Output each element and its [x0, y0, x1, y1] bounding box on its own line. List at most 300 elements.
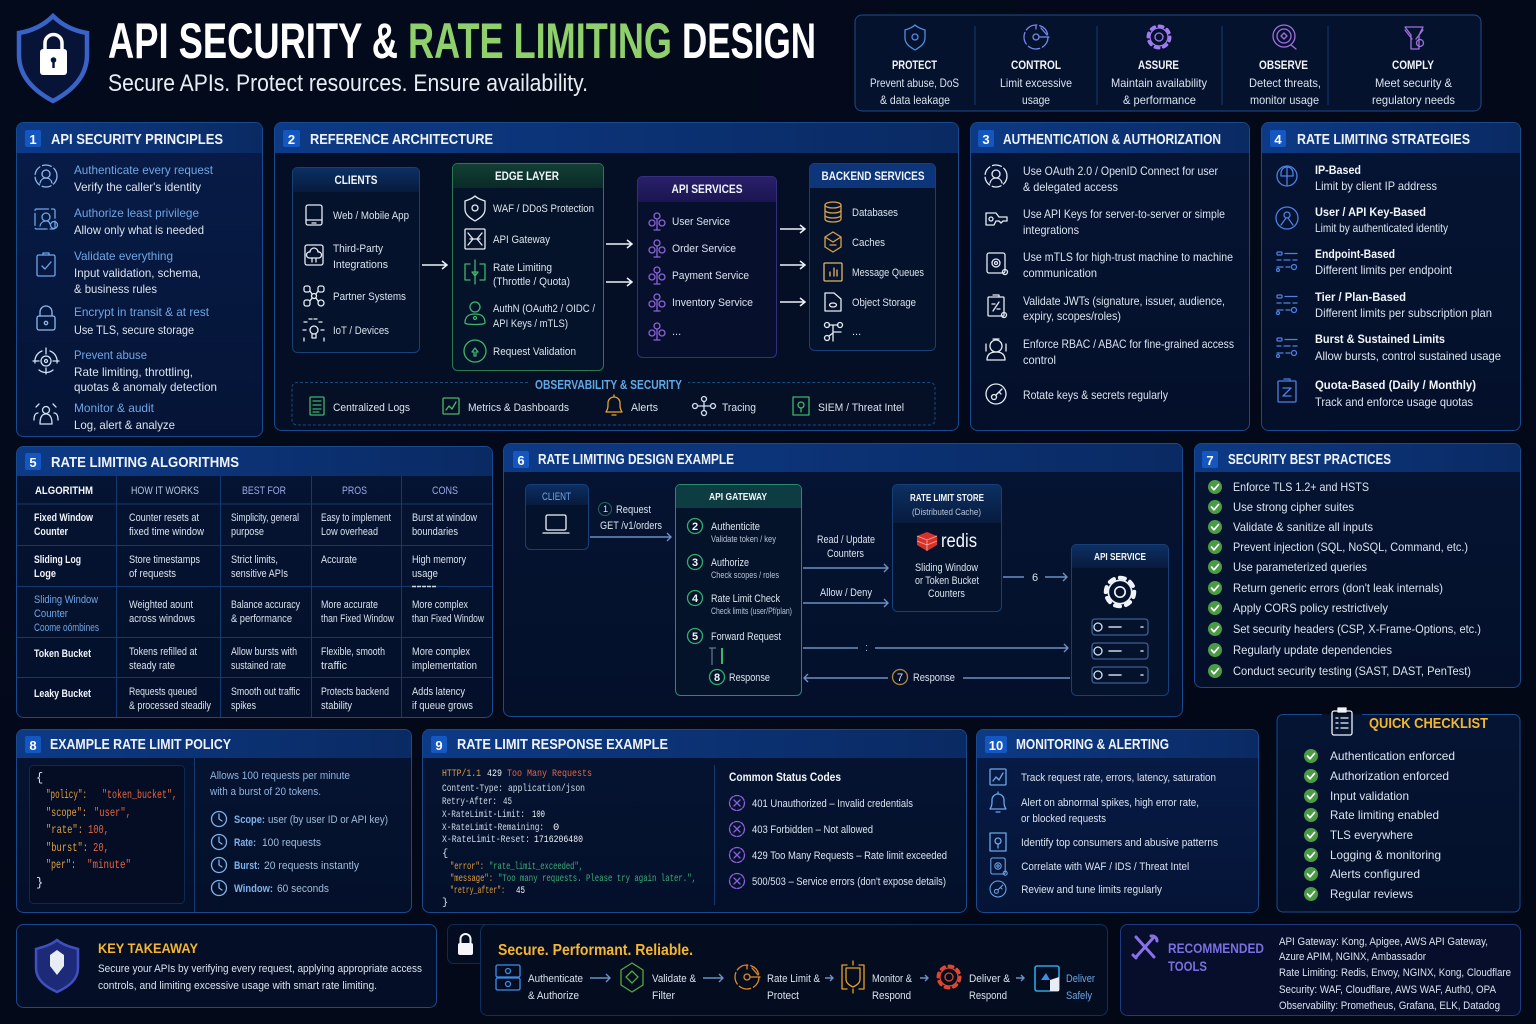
- arrows: services to backend: [780, 225, 805, 306]
- strategy: endpoint: Endpoint-Based: [1315, 247, 1395, 261]
- panel: quick checklist: [1277, 708, 1520, 912]
- title: DESIGN: [682, 13, 816, 69]
- item: review: Review and tune limits regularly: [1021, 884, 1162, 896]
- practices list: Conduct security testing (SAST, DAST, PenTest): [1233, 664, 1471, 678]
- clients box: IoT / Devices: [333, 325, 389, 337]
- backend services box: [810, 164, 936, 350]
- api service box: [1072, 544, 1168, 696]
- row: leaky bucket: spikes: [231, 700, 256, 712]
- status 500: [730, 874, 946, 888]
- row: token bucket: [34, 646, 477, 672]
- item: mtls: Use mTLS for high-trust machine to machine: [1023, 250, 1233, 264]
- code block: policy json: 20,: [93, 841, 109, 855]
- table header: CONS: [432, 485, 458, 497]
- edge layer box: [452, 164, 604, 370]
- api services box: Inventory Service: [672, 297, 753, 309]
- panel: key takeaway: [16, 924, 436, 1008]
- step 7: response: [804, 670, 1070, 684]
- item: correlate: Correlate with WAF / IDS / Threat Intel: [1021, 861, 1189, 873]
- item: oauth: [985, 164, 1218, 194]
- arrow: [920, 975, 928, 981]
- step: deliver: Respond: [969, 990, 1007, 1002]
- heading: [1168, 940, 1264, 974]
- row: sliding log: [34, 554, 466, 586]
- code block: http response: X-RateLimit-Remaining:: [442, 822, 544, 834]
- step 3: Check scopes / roles: [711, 570, 779, 581]
- strategy: burst: Allow bursts, control sustained usage: [1315, 349, 1501, 363]
- principle: encrypt: [37, 305, 210, 337]
- panel 6: rate limiting design example: 6: [517, 453, 525, 468]
- table header: HOW IT WORKS: [131, 485, 199, 497]
- step: deliver safely: Safely: [1066, 990, 1092, 1002]
- panel 5: rate limiting algorithms: 5: [29, 455, 37, 470]
- service instances: [1092, 619, 1148, 683]
- icon: takeaway shield: [36, 940, 78, 992]
- code block: http response: }: [442, 897, 448, 909]
- status 403: 403 Forbidden – Not allowed: [752, 824, 873, 836]
- row: fixed window: purpose: [231, 526, 264, 538]
- status 429: 429 Too Many Requests – Rate limit exceeded: [752, 850, 947, 862]
- tools list: Azure APIM, NGINX, Ambassador: [1279, 951, 1426, 963]
- step 3: [688, 554, 779, 581]
- status 401: 401 Unauthorized – Invalid credentials: [752, 798, 913, 810]
- principle: authorize: [35, 206, 204, 237]
- code block: policy json: 100,: [88, 823, 109, 837]
- policy: rate: Rate:: [234, 837, 256, 849]
- code block: http response: Content-Type:: [442, 783, 503, 795]
- policy: window: 60 seconds: [277, 883, 329, 895]
- code block: http response: application/json: [508, 783, 585, 795]
- code block: policy json: "per":: [46, 858, 76, 872]
- principle: prevent abuse: Prevent abuse: [74, 348, 147, 362]
- row: leaky bucket: & processed steadily: [129, 700, 211, 712]
- observability strip: OBSERVABILITY & SECURITY: [535, 378, 683, 392]
- table header: PROS: [342, 485, 367, 497]
- checklist: Rate limiting enabled: [1330, 808, 1439, 822]
- goal: protect: Prevent abuse, DoS: [870, 76, 959, 90]
- takeaway text: Secure your APIs by verifying every request, applying appropriate access: [98, 963, 422, 975]
- policy: scope: [212, 812, 388, 826]
- practices list: [1208, 480, 1481, 678]
- code block: policy json: "scope":: [46, 806, 87, 820]
- row: token bucket: traffic: [321, 660, 347, 672]
- policy: window: Window:: [234, 883, 273, 895]
- item: rotate: [986, 384, 1168, 404]
- strategy: user: Limit by authenticated identity: [1315, 221, 1448, 235]
- code block: http response: 429: [487, 768, 502, 780]
- checklist: Logging & monitoring: [1330, 848, 1441, 862]
- rate limit store box: Counters: [928, 588, 965, 600]
- row: leaky bucket: Adds latency: [412, 686, 465, 698]
- goal: control: CONTROL: [1011, 58, 1061, 72]
- goal: control: usage: [1022, 93, 1050, 107]
- icon: clipboard: [1332, 708, 1352, 735]
- edge layer box: WAF / DDoS Protection: [493, 203, 594, 215]
- principle: prevent abuse: quotas & anomaly detection: [74, 380, 217, 394]
- item: rbac: [986, 337, 1234, 367]
- panel 3: authentication and authorization: 3: [982, 132, 990, 147]
- strategy: user: User / API Key-Based: [1315, 205, 1426, 219]
- status 429: [730, 848, 947, 862]
- step: rate limit: [735, 965, 821, 1002]
- principle: authenticate: Authenticate every request: [74, 163, 214, 177]
- step 5: 5: [692, 631, 698, 643]
- rate limit store box: (Distributed Cache): [912, 507, 981, 518]
- step: rate limit: Rate Limit &: [767, 973, 821, 985]
- flow: read update counters: [803, 534, 888, 572]
- step: deliver: [938, 966, 1011, 1002]
- principle: authorize: Authorize least privilege: [74, 206, 199, 220]
- item: alert: Alert on abnormal spikes, high error rate,: [1021, 797, 1199, 809]
- panel: goals strip: [855, 15, 1481, 111]
- api services box: ...: [672, 326, 681, 338]
- edge layer box: Request Validation: [493, 346, 576, 358]
- api services box: API SERVICES: [672, 182, 742, 196]
- observability strip: SIEM / Threat Intel: [818, 402, 904, 414]
- panel 2: reference architecture: [274, 122, 958, 430]
- step 8: 8: [714, 672, 720, 684]
- step 1: request: [590, 502, 671, 541]
- item: api keys: integrations: [1023, 223, 1079, 237]
- backend services box: Object Storage: [852, 297, 916, 309]
- practices list: Regularly update dependencies: [1233, 643, 1392, 657]
- icon: gear: [1106, 578, 1134, 606]
- step 4: [688, 590, 792, 617]
- panel 4: rate limiting strategies: [1262, 122, 1520, 430]
- strategy: tier: [1276, 290, 1492, 320]
- code block: policy json: "policy":: [46, 788, 87, 802]
- code block: policy json: }: [36, 876, 43, 890]
- clients box: Web / Mobile App: [333, 210, 409, 222]
- tools list: Rate Limiting: Redis, Envoy, NGINX, Kong, Cloudflare: [1279, 967, 1511, 979]
- code block: http response: "retry_after":: [450, 885, 505, 897]
- status 403: [730, 822, 873, 836]
- practices list: Prevent injection (SQL, NoSQL, Command, etc.): [1233, 540, 1468, 554]
- heading: SECURITY BEST PRACTICES: [1228, 451, 1391, 468]
- panel 10: monitoring and alerting: [976, 730, 1258, 912]
- row: fixed window: [34, 512, 477, 538]
- item: consumers: Identify top consumers and abusive patterns: [1021, 837, 1218, 849]
- code block: http response: {: [442, 848, 448, 860]
- code block: policy json: "user",: [94, 806, 131, 820]
- flow: allow deny: Allow / Deny: [820, 587, 872, 599]
- arrow: forward request: :: [865, 642, 868, 654]
- table header: [35, 485, 458, 497]
- clients box: [292, 168, 420, 352]
- icon: tools: [1133, 936, 1157, 958]
- strategy: ip: [1277, 163, 1437, 193]
- row: fixed window: boundaries: [412, 526, 458, 538]
- row: token bucket: Token Bucket: [34, 648, 91, 660]
- code block: policy json: "burst":: [46, 841, 88, 855]
- step: authenticate: [496, 965, 583, 1002]
- edge layer box: API Gateway: [493, 234, 550, 246]
- arrow: [825, 975, 833, 981]
- goal: observe: [1249, 25, 1321, 107]
- strategy: ip: Limit by client IP address: [1315, 179, 1437, 193]
- item: jwt: expiry, scopes/roles): [1023, 309, 1121, 323]
- arrow: step 6 store to service: 6: [1032, 572, 1038, 584]
- goal: assure: ASSURE: [1138, 58, 1179, 72]
- item: rbac: control: [1023, 353, 1056, 367]
- row: sliding window: than Fixed Window: [321, 613, 394, 625]
- row: leaky bucket: stability: [321, 700, 352, 712]
- goal: comply: [1372, 27, 1455, 107]
- heading: Secure. Performant. Reliable.: [498, 942, 693, 959]
- step: deliver safely: Deliver: [1066, 973, 1095, 985]
- code block: policy json: "rate":: [46, 823, 83, 837]
- observability strip: Alerts: [631, 402, 658, 414]
- code block: policy json: "minute": [87, 858, 131, 872]
- goal: protect: [870, 25, 959, 107]
- edge layer box: Rate Limiting: [493, 262, 552, 274]
- principle: encrypt: Use TLS, secure storage: [74, 323, 194, 337]
- panel 7: security best practices: 7: [1206, 453, 1214, 468]
- goal: observe: Detect threats,: [1249, 76, 1321, 90]
- arrow: step 6 store to service: [1003, 572, 1067, 584]
- observability strip: [292, 378, 935, 425]
- strategy: user: [1276, 205, 1448, 235]
- row: leaky bucket: Smooth out traffic: [231, 686, 300, 698]
- row: sliding window: Balance accuracy: [231, 599, 300, 611]
- panel 4: rate limiting strategies: 4: [1274, 132, 1282, 147]
- goal: assure: Maintain availability: [1111, 76, 1207, 90]
- item: track: Track request rate, errors, latency, saturation: [1021, 772, 1216, 784]
- policy: rate: [212, 834, 321, 850]
- item: jwt: Validate JWTs (signature, issuer, audience,: [1023, 294, 1225, 308]
- title: [108, 13, 816, 69]
- strategy: burst: Burst & Sustained Limits: [1315, 332, 1445, 346]
- principle: validate: Validate everything: [74, 249, 173, 263]
- row: sliding window: More complex: [412, 599, 468, 611]
- principle: prevent abuse: [33, 348, 217, 394]
- code block: http response: "message":: [450, 873, 493, 885]
- item: oauth: Use OAuth 2.0 / OpenID Connect for user: [1023, 164, 1218, 178]
- item: alert: [990, 792, 1199, 825]
- item: api keys: [986, 207, 1225, 237]
- observability strip: Centralized Logs: [333, 402, 410, 414]
- step: deliver: Deliver &: [969, 973, 1011, 985]
- step 3: Authorize: [711, 557, 749, 569]
- panel 1: api security principles: 1: [29, 132, 37, 147]
- api services box: User Service: [672, 216, 730, 228]
- row: sliding window: More accurate: [321, 599, 378, 611]
- strategy: quota: [1278, 378, 1476, 409]
- code block: http response: 0: [553, 822, 559, 834]
- item: mtls: [987, 250, 1233, 280]
- checklist: Input validation: [1330, 789, 1409, 803]
- observability strip: Metrics & Dashboards: [468, 402, 569, 414]
- policy description: Allows 100 requests per minute: [210, 770, 350, 782]
- row: sliding window: than Fixed Window: [412, 613, 484, 625]
- code block: policy json: {: [36, 771, 43, 785]
- goal: assure: [1111, 26, 1207, 107]
- policy: rate: 100 requests: [262, 837, 321, 849]
- item: review: [990, 881, 1162, 897]
- heading: RATE LIMITING STRATEGIES: [1297, 131, 1470, 148]
- goal: observe: monitor usage: [1250, 93, 1319, 107]
- step 2: 2: [692, 521, 698, 533]
- principle: authorize: Allow only what is needed: [74, 223, 204, 237]
- row: sliding window: Counter: [34, 608, 68, 620]
- row: sliding log: of requests: [129, 568, 176, 580]
- row: leaky bucket: [34, 686, 473, 712]
- heading: KEY TAKEAWAY: [98, 940, 199, 956]
- row: fixed window: Fixed Window: [34, 512, 93, 524]
- heading: AUTHENTICATION & AUTHORIZATION: [1003, 131, 1221, 148]
- arrow: [1016, 975, 1024, 981]
- heading: EXAMPLE RATE LIMIT POLICY: [50, 736, 231, 753]
- step 1: request: 1: [603, 504, 608, 514]
- panel 9: rate limit response example: 9: [435, 738, 443, 753]
- step 7: response: Response: [913, 672, 955, 684]
- heading: RATE LIMITING ALGORITHMS: [51, 454, 239, 471]
- step 5: Forward Request: [711, 631, 781, 643]
- panel 6: rate limiting design example: [504, 444, 1182, 716]
- row: sliding log: sensitive APIs: [231, 568, 288, 580]
- principle: monitor: Log, alert & analyze: [74, 418, 175, 432]
- policy description: [209, 770, 350, 798]
- step 7: response: 7: [897, 672, 903, 684]
- step: validate: Filter: [652, 990, 675, 1002]
- checklist: Alerts configured: [1330, 867, 1420, 881]
- takeaway text: [98, 963, 422, 992]
- practices list: Return generic errors (don't leak internals): [1233, 581, 1443, 595]
- panel 9: rate limit response example: [422, 730, 966, 912]
- status codes heading: Common Status Codes: [729, 770, 841, 784]
- tools list: [1279, 936, 1511, 1012]
- practices list: Apply CORS policy restrictively: [1233, 601, 1388, 615]
- item: oauth: & delegated access: [1023, 180, 1118, 194]
- edge layer box: AuthN (OAuth2 / OIDC /: [493, 303, 596, 315]
- row: token bucket: implementation: [412, 660, 477, 672]
- code block: http response: Retry-After:: [442, 796, 497, 808]
- client box: CLIENT: [542, 491, 571, 503]
- goal: observe: OBSERVE: [1259, 58, 1308, 72]
- heading: TOOLS: [1168, 958, 1207, 974]
- goal: comply: regulatory needs: [1372, 93, 1455, 107]
- table header: ALGORITHM: [35, 485, 93, 497]
- checklist: Authorization enforced: [1330, 769, 1449, 783]
- step: monitor: [842, 961, 913, 1002]
- status 401: [730, 796, 913, 810]
- code block: http response: X-RateLimit-Reset:: [442, 834, 530, 846]
- row: sliding log: usage: [412, 568, 438, 580]
- flow: read update counters: Read / Update: [817, 534, 875, 546]
- step 4: Check limits (user/Pf/plan): [711, 606, 792, 617]
- strategy: quota: Quota-Based (Daily / Monthly): [1315, 378, 1476, 392]
- code block: http response: 45: [516, 885, 525, 897]
- step: deliver safely: [1035, 966, 1095, 1002]
- practices list: Use parameterized queries: [1233, 560, 1367, 574]
- row: sliding log: Store timestamps: [129, 554, 200, 566]
- principle: authenticate: Verify the caller's identity: [74, 180, 201, 194]
- goal: protect: & data leakage: [880, 93, 950, 107]
- code block: http response: 45: [503, 796, 512, 808]
- item: api keys: Use API Keys for server-to-server or simple: [1023, 207, 1225, 221]
- panel: secure performant reliable: [448, 924, 1108, 1016]
- api services box: Payment Service: [672, 270, 749, 282]
- panel 10: monitoring and alerting: 10: [989, 738, 1003, 753]
- policy: burst: [212, 858, 359, 872]
- backend services box: ...: [852, 326, 861, 338]
- row: token bucket: More complex: [412, 646, 470, 658]
- goal: comply: Meet security &: [1375, 76, 1452, 90]
- panel 8: example rate limit policy: [16, 730, 412, 912]
- takeaway text: controls, and limiting excessive usage with smart rate limiting.: [98, 980, 377, 992]
- step 2: Validate token / key: [711, 534, 776, 545]
- api gateway box: API GATEWAY: [709, 491, 767, 503]
- step 4: Rate Limit Check: [711, 593, 780, 605]
- row: leaky bucket: Protects backend: [321, 686, 389, 698]
- backend services box: Databases: [852, 207, 898, 219]
- header: shield logo: [19, 16, 87, 101]
- goal: control: [1000, 25, 1072, 107]
- strategy: burst: [1276, 332, 1501, 363]
- step 8: [710, 670, 770, 684]
- goal: assure: & performance: [1123, 93, 1196, 107]
- subtitle: Secure APIs. Protect resources. Ensure availability.: [108, 70, 588, 97]
- principle: validate: & business rules: [74, 282, 157, 296]
- code block: http response: HTTP/1.1: [442, 768, 481, 780]
- policy: scope: Scope:: [234, 814, 265, 826]
- principle: authenticate: [35, 163, 214, 194]
- title: API SECURITY &: [108, 13, 398, 69]
- step 1: request: Request: [616, 504, 651, 516]
- row: fixed window: Low overhead: [321, 526, 378, 538]
- row: fixed window: fixed time window: [129, 526, 204, 538]
- heading: MONITORING & ALERTING: [1016, 736, 1169, 753]
- panel 7: security best practices: [1194, 444, 1520, 688]
- row: sliding window: Coome oómbines: [34, 622, 99, 634]
- practices list: Validate & sanitize all inputs: [1233, 520, 1373, 534]
- principle: validate: Input validation, schema,: [74, 266, 201, 280]
- edge layer box: (Throttle / Quota): [493, 276, 570, 288]
- strategy: endpoint: [1276, 247, 1453, 277]
- clients box: Integrations: [333, 259, 388, 271]
- step: monitor: Monitor &: [872, 973, 913, 985]
- panel 5: rate limiting algorithms: [16, 446, 492, 718]
- row: sliding window: Weighted aount: [129, 599, 193, 611]
- code block: http response: [442, 768, 696, 909]
- code block: policy json: [30, 766, 184, 904]
- title: RATE LIMITING: [408, 13, 672, 69]
- heading: API SECURITY PRINCIPLES: [51, 131, 223, 148]
- client box: [526, 484, 588, 550]
- principle: prevent abuse: Rate limiting, throttling,: [74, 365, 193, 379]
- panel 2: reference architecture: 2: [288, 132, 295, 147]
- api service box: API SERVICE: [1094, 551, 1146, 563]
- strategy: tier: Different limits per subscription plan: [1315, 306, 1492, 320]
- row: sliding window: & performance: [231, 613, 292, 625]
- arrow: [590, 974, 610, 982]
- code block: http response: "rate_limit_exceeded",: [489, 861, 583, 873]
- row: sliding log: Strict limits,: [231, 554, 278, 566]
- rate limit store box: Sliding Window: [915, 562, 978, 574]
- arrow: [703, 974, 723, 982]
- row: fixed window: Counter: [34, 526, 69, 538]
- heading: REFERENCE ARCHITECTURE: [310, 131, 493, 148]
- policy description: with a burst of 20 tokens.: [209, 786, 321, 798]
- row: token bucket: steady rate: [129, 660, 175, 672]
- api gateway box: [676, 484, 802, 696]
- backend services box: Caches: [852, 237, 885, 249]
- redis logo: redis: [941, 531, 977, 552]
- row: sliding log: Loge: [34, 568, 56, 580]
- clients box: CLIENTS: [334, 173, 378, 187]
- principle: monitor: Monitor & audit: [74, 401, 155, 415]
- row: sliding window: Sliding Window: [34, 594, 98, 606]
